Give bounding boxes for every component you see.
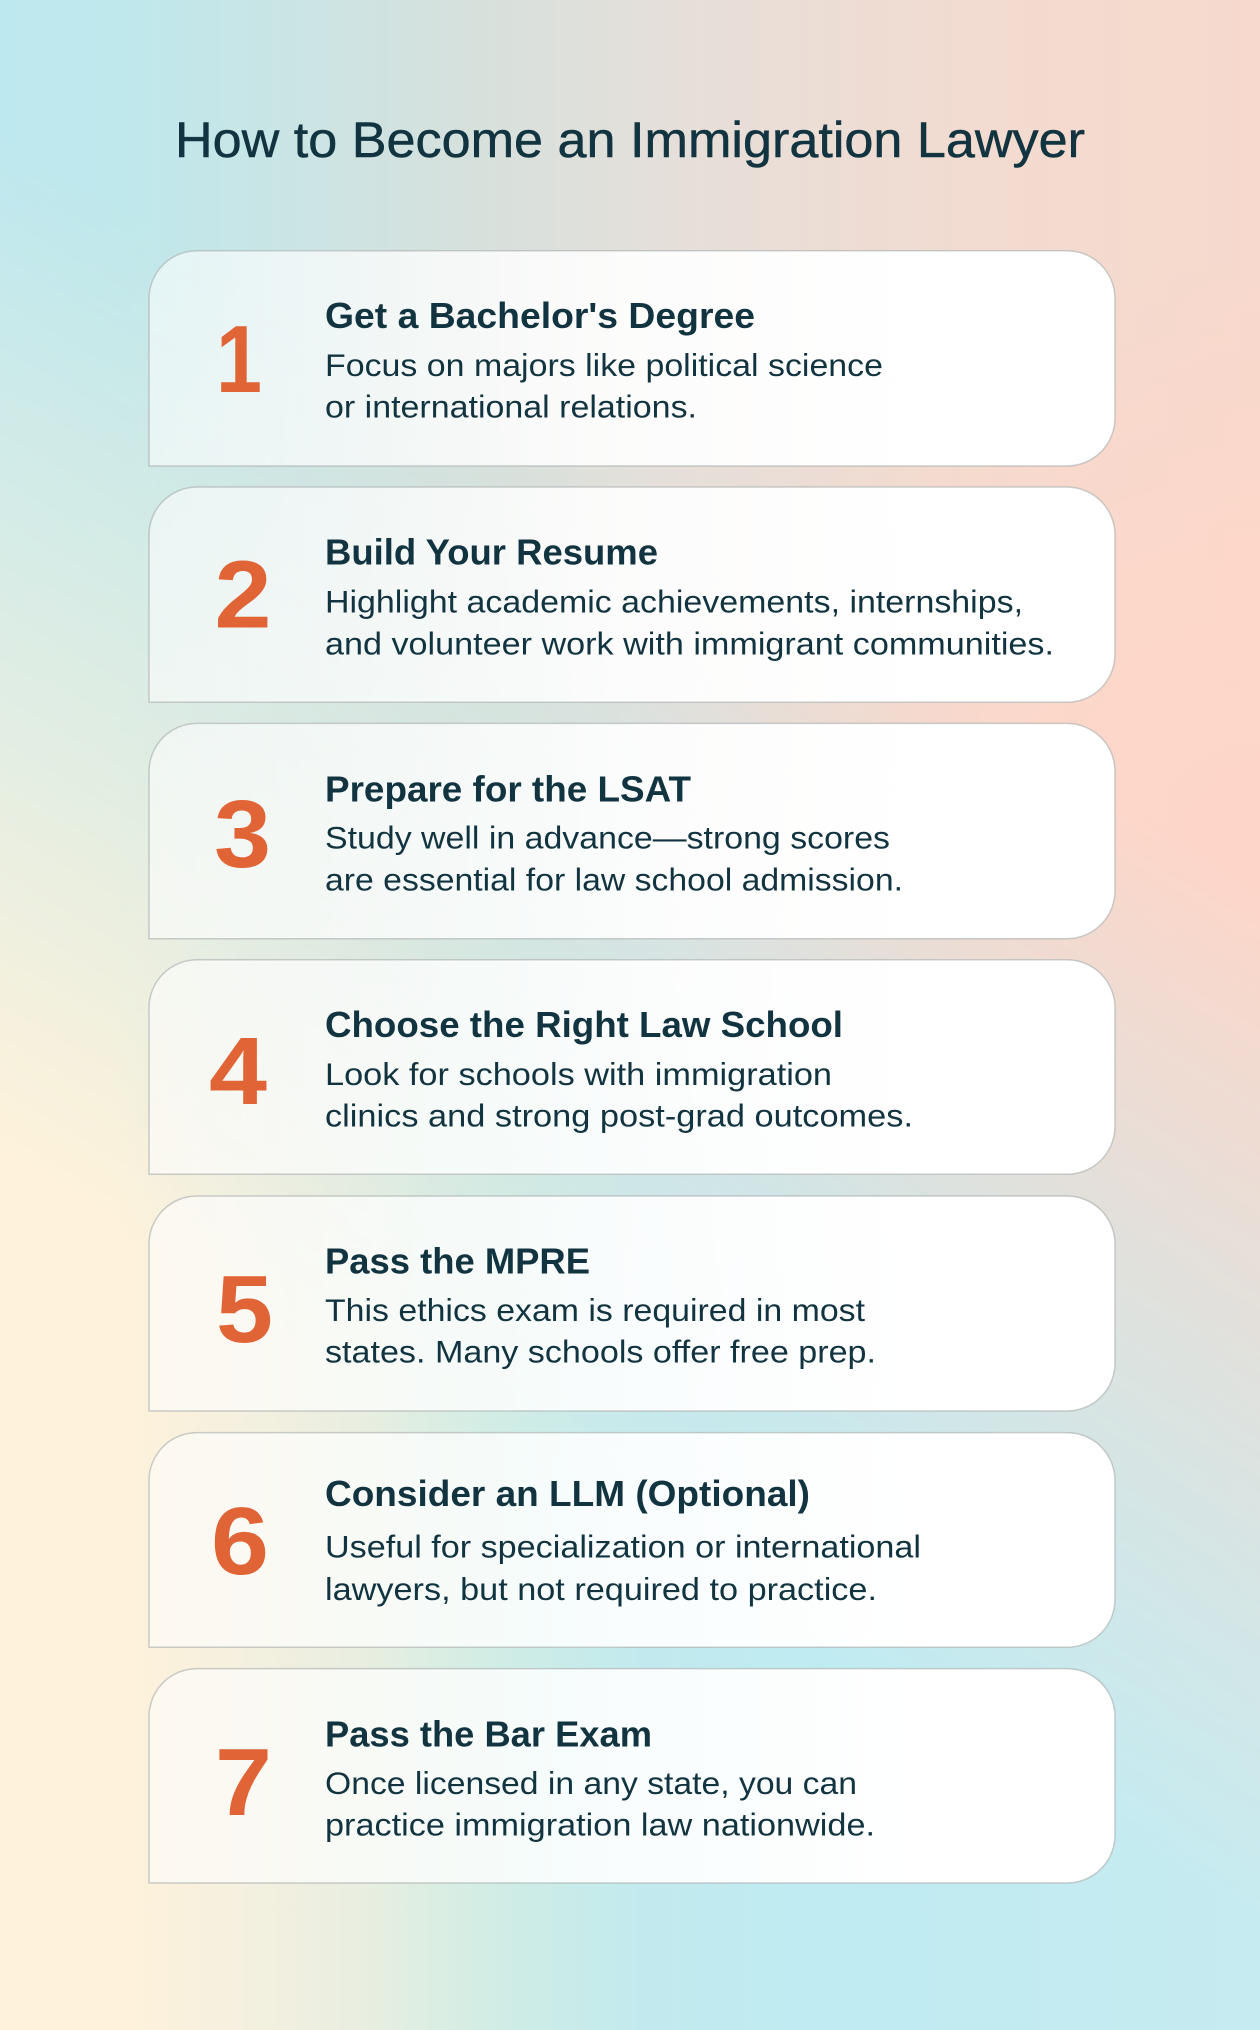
step number 3: 3 <box>214 781 271 888</box>
description <box>325 1056 913 1134</box>
description: are essential for law school admission. <box>325 862 903 898</box>
step number 5: 5 <box>216 1256 273 1363</box>
description: practice immigration law nationwide. <box>325 1807 875 1843</box>
description: lawyers, but not required to practice. <box>325 1571 877 1607</box>
description <box>325 583 1054 661</box>
panel: step 1 <box>149 251 1115 466</box>
step number 2: 2 <box>214 541 272 648</box>
description: Focus on majors like political science <box>325 347 883 383</box>
title: How to Become an Immigration Lawyer <box>175 112 1085 168</box>
description: Useful for specialization or international <box>325 1528 921 1564</box>
description: or international relations. <box>325 388 697 424</box>
description <box>325 1528 921 1607</box>
heading: Build Your Resume <box>325 531 658 572</box>
heading: Choose the Right Law School <box>325 1004 843 1045</box>
panel: step 4 <box>149 960 1115 1174</box>
step number 6: 6 <box>211 1488 269 1595</box>
card background <box>149 723 1115 939</box>
description: Look for schools with immigration <box>325 1056 832 1092</box>
panel: step 3 <box>149 723 1115 939</box>
card background <box>149 1669 1115 1883</box>
description: Study well in advance—strong scores <box>325 819 890 855</box>
step number 4: 4 <box>209 1018 267 1125</box>
heading: Pass the Bar Exam <box>325 1714 652 1755</box>
panel: step 7 <box>149 1669 1115 1883</box>
panel: step 2 <box>149 487 1115 702</box>
card background <box>149 1433 1115 1647</box>
card background <box>149 960 1115 1174</box>
description: This ethics exam is required in most <box>325 1292 865 1328</box>
description: clinics and strong post-grad outcomes. <box>325 1098 913 1134</box>
description: states. Many schools offer free prep. <box>325 1334 876 1370</box>
description: and volunteer work with immigrant communities. <box>325 625 1054 661</box>
panel: step 5 <box>149 1196 1115 1411</box>
card background <box>149 251 1115 466</box>
description: Highlight academic achievements, internships, <box>325 583 1023 619</box>
panel: step 6 <box>149 1433 1115 1647</box>
description <box>325 347 883 424</box>
description <box>325 1765 875 1843</box>
description <box>325 1292 876 1370</box>
description <box>325 819 903 898</box>
heading: Pass the MPRE <box>325 1240 590 1281</box>
heading: Get a Bachelor's Degree <box>325 295 755 336</box>
heading: Prepare for the LSAT <box>325 769 691 810</box>
card background <box>149 487 1115 702</box>
heading: Consider an LLM (Optional) <box>325 1473 810 1514</box>
step number 1: 1 <box>216 306 262 413</box>
card background <box>149 1196 1115 1411</box>
description: Once licensed in any state, you can <box>325 1765 857 1801</box>
step number 7: 7 <box>215 1729 272 1836</box>
